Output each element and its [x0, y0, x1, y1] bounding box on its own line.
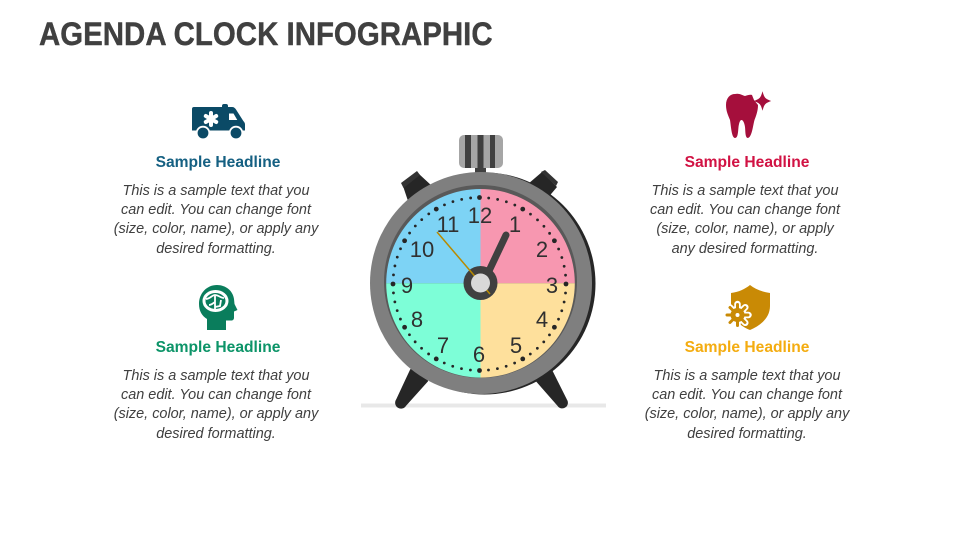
clock numerals: 12	[468, 203, 492, 228]
title: AGENDA CLOCK INFOGRAPHIC	[39, 16, 493, 52]
text: ambulance: can edit. You can change font	[121, 202, 311, 218]
clock numerals: 1	[509, 212, 521, 237]
hour hand	[488, 235, 506, 273]
text: shield: This is a sample text that you	[654, 368, 840, 384]
clock numerals: 10	[410, 237, 434, 262]
text: head with brain: (size, color, name), or apply any	[114, 406, 318, 422]
side bells	[403, 172, 557, 201]
case	[374, 172, 596, 394]
text: ambulance: desired formatting.	[156, 241, 276, 257]
clock numerals: 9	[401, 273, 413, 298]
text: shield: can edit. You can change font	[652, 387, 842, 403]
heading: shield: Sample Headline	[685, 338, 809, 356]
centre hub	[464, 266, 498, 300]
minute hand	[437, 232, 490, 294]
text: head with brain: desired formatting.	[156, 426, 276, 442]
clock numerals: 7	[437, 333, 449, 358]
legs	[396, 370, 567, 408]
heading: ambulance: Sample Headline	[156, 154, 280, 170]
heading: head with brain: Sample Headline	[156, 338, 280, 356]
icon: tooth with sparkle	[726, 91, 771, 138]
centre cap	[471, 274, 490, 292]
clock numerals: 5	[510, 333, 522, 358]
clock numerals: 6	[473, 342, 485, 367]
text: ambulance	[114, 183, 319, 257]
text: head with brain: This is a sample text that you	[123, 368, 309, 384]
icon: head with brain	[199, 285, 238, 330]
clock numerals: 8	[411, 307, 423, 332]
text: shield	[645, 368, 850, 442]
clock numerals: 11	[437, 212, 459, 237]
text: shield: desired formatting.	[687, 426, 807, 442]
minute dots	[391, 195, 568, 373]
clock numerals: 4	[536, 307, 548, 332]
icon: ambulance	[192, 104, 245, 138]
clock numerals: 3	[546, 273, 558, 298]
top knob	[459, 135, 503, 177]
text: tooth: (size, color, name), or apply	[656, 221, 834, 237]
clock numerals	[401, 203, 558, 367]
dial quadrants	[386, 189, 575, 378]
text: tooth: can edit. You can change font	[650, 202, 840, 218]
icon: shield with virus	[726, 285, 770, 330]
text: ambulance: (size, color, name), or apply any	[114, 221, 318, 237]
ground shadow	[361, 404, 606, 408]
text: ambulance: This is a sample text that you	[123, 183, 309, 199]
text: tooth: any desired formatting.	[672, 241, 818, 257]
text: head with brain: can edit. You can change font	[121, 387, 311, 403]
text: tooth	[650, 183, 840, 257]
text: head with brain	[114, 368, 319, 442]
heading: tooth: Sample Headline	[685, 154, 809, 170]
clock illustration	[361, 135, 606, 409]
text: tooth: This is a sample text that you	[652, 183, 838, 199]
clock numerals: 2	[536, 237, 548, 262]
text: shield: (size, color, name), or apply any	[645, 406, 849, 422]
